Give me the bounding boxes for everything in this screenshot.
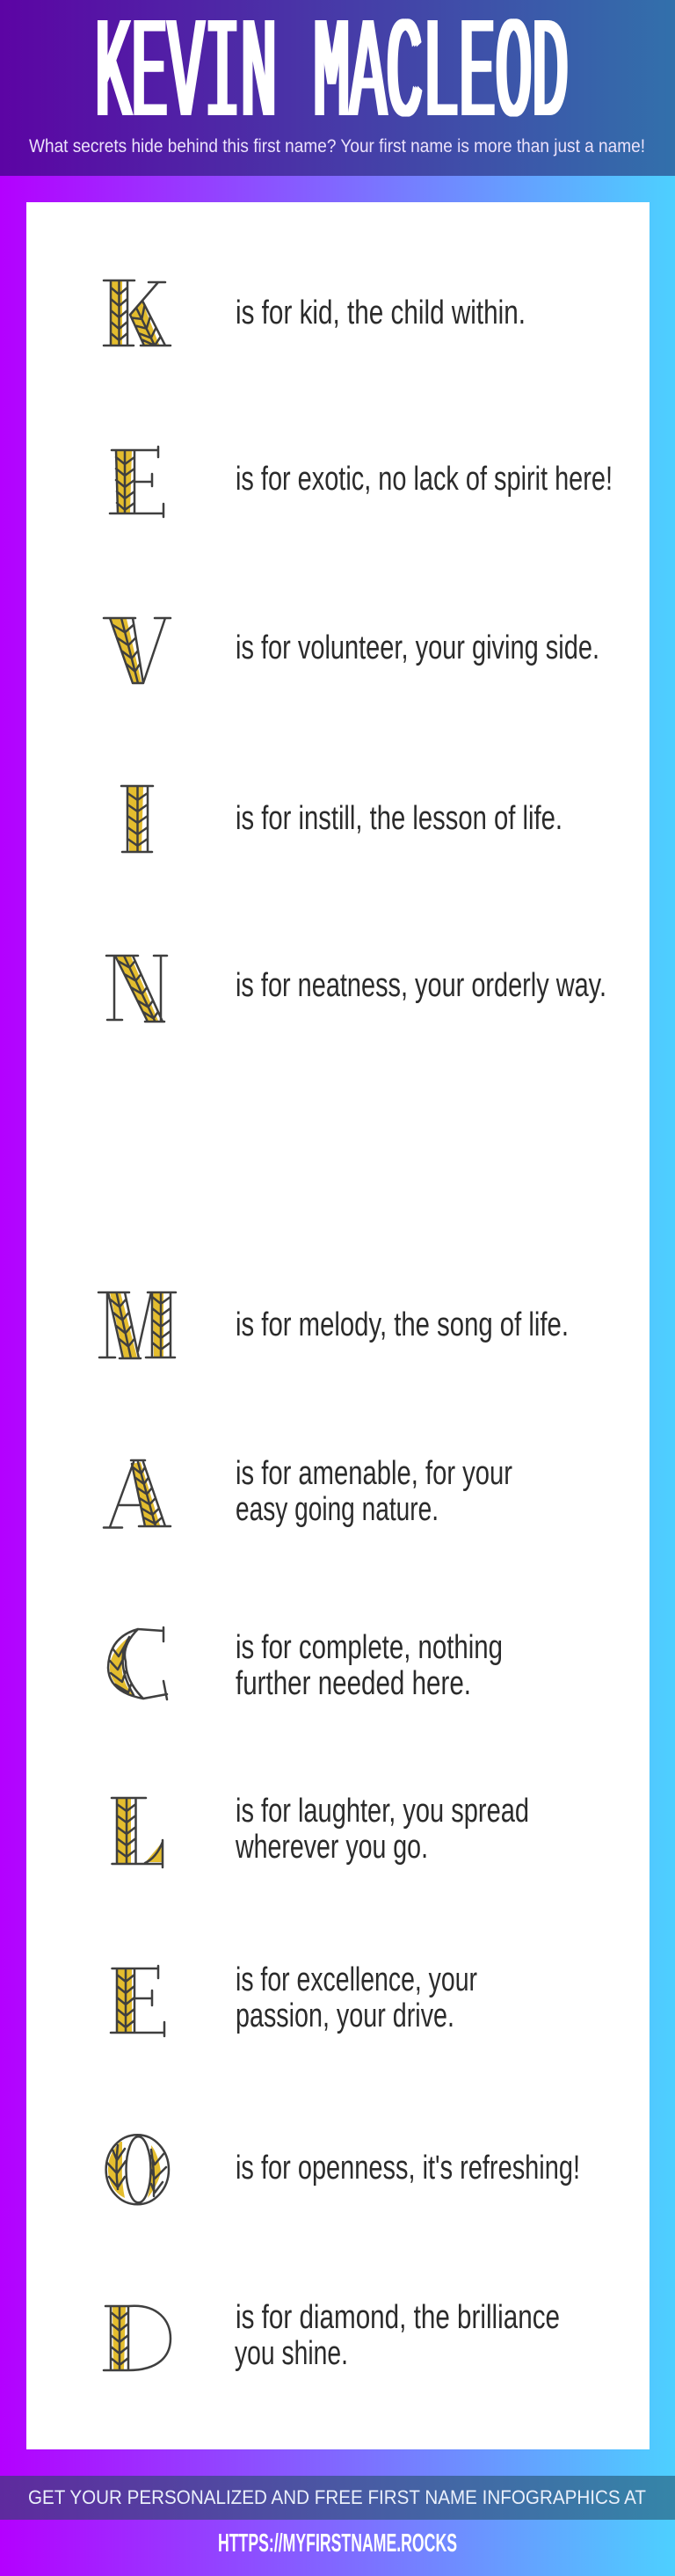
text: D lines: you shine.	[235, 2335, 348, 2372]
row: E	[110, 447, 613, 517]
row: M	[98, 1292, 569, 1358]
text: E second lines: is for excellence, your	[236, 1961, 477, 1998]
footer band	[0, 2476, 675, 2520]
row: E second	[111, 1961, 477, 2036]
text: C lines: is for complete, nothing	[236, 1629, 503, 1666]
text: A lines: easy going nature.	[236, 1491, 439, 1528]
icon: wheat letter L	[112, 1798, 163, 1867]
row: O	[106, 2135, 580, 2204]
footer url: HTTPS://MYFIRSTNAME.ROCKS	[218, 2529, 457, 2558]
row: D	[104, 2299, 560, 2372]
icon: wheat letter I	[121, 786, 153, 852]
text: A lines	[236, 1455, 512, 1528]
text: I line: is for instill, the lesson of life.	[236, 800, 562, 837]
icon: wheat letter M	[98, 1292, 176, 1358]
text: E second lines: passion, your drive.	[236, 1997, 454, 2034]
icon: wheat letter V	[104, 618, 171, 683]
text: L lines	[235, 1793, 529, 1866]
text: D lines	[235, 2299, 560, 2372]
row: L	[112, 1793, 529, 1867]
icon: wheat letter E	[110, 447, 163, 517]
text: M line: is for melody, the song of life.	[236, 1306, 569, 1343]
row: A	[104, 1455, 512, 1528]
row: V	[104, 618, 599, 683]
icon: wheat letter C	[108, 1627, 167, 1699]
icon: wheat letter N	[106, 956, 167, 1022]
icon: wheat letter E second	[111, 1966, 164, 2036]
text: C lines: further needed here.	[236, 1665, 471, 1702]
footer call to action: GET YOUR PERSONALIZED AND FREE FIRST NAME INFOGRAPHICS AT	[28, 2486, 646, 2508]
icon: wheat letter K	[104, 280, 171, 346]
text: A lines: is for amenable, for your	[236, 1455, 512, 1492]
icon: wheat letter A	[104, 1460, 171, 1528]
text: L lines: is for laughter, you spread	[236, 1793, 529, 1830]
text: O line: is for openness, it's refreshing!	[236, 2150, 580, 2187]
text: D lines: is for diamond, the brilliance	[236, 2299, 560, 2336]
row: C	[108, 1627, 503, 1702]
row: K	[104, 280, 526, 346]
text: K line: is for kid, the child within.	[236, 295, 526, 331]
text: E second lines	[236, 1961, 477, 2034]
icon: wheat letter O	[106, 2135, 169, 2204]
row: I	[121, 786, 562, 852]
icon: wheat letter D	[104, 2306, 171, 2370]
title: KEVIN MACLEOD	[95, 0, 569, 159]
header band	[0, 0, 675, 176]
text: C lines	[236, 1629, 503, 1702]
row: N	[106, 956, 606, 1022]
text: L lines: wherever you go.	[235, 1829, 428, 1866]
